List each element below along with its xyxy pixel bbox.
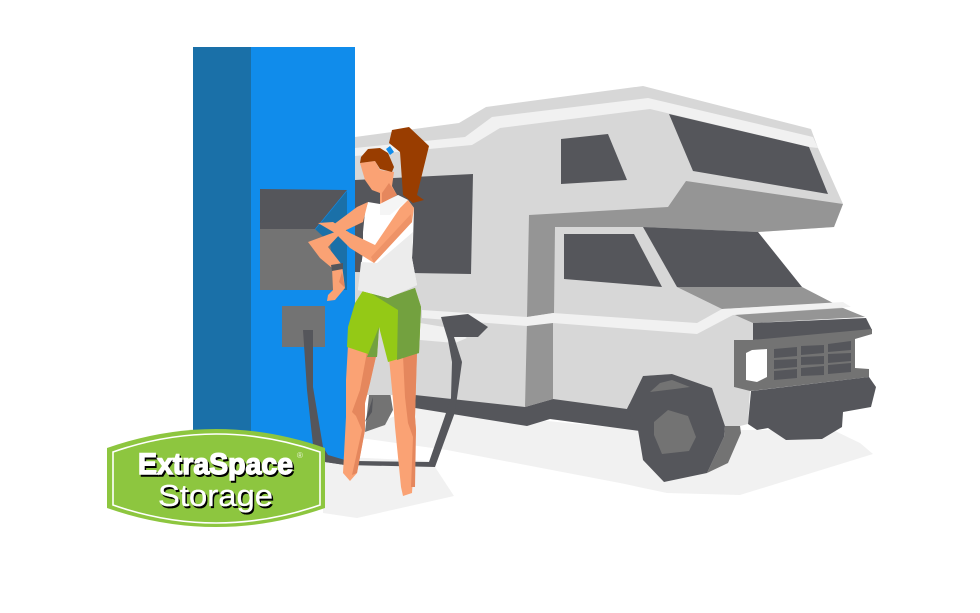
hood front	[735, 308, 865, 323]
woman	[308, 127, 429, 496]
power post and cable	[325, 314, 488, 467]
logo: Extra Space Storage	[107, 429, 325, 527]
large side window	[355, 174, 473, 274]
logo text: ®	[297, 451, 303, 460]
ground shadows	[323, 408, 873, 518]
RV	[355, 86, 876, 482]
body stripe	[422, 302, 851, 334]
grille frame	[734, 329, 872, 391]
watch	[331, 263, 343, 271]
right leg	[389, 352, 417, 496]
logo text shadow: ExtraSpace	[140, 450, 294, 483]
logo text shadow	[140, 450, 294, 515]
logo text: ExtraSpace	[138, 448, 293, 481]
hair tie	[386, 146, 394, 155]
far arm	[333, 202, 368, 233]
storage tower	[193, 47, 355, 465]
forearm and hand	[308, 232, 345, 301]
windshield	[643, 227, 802, 287]
overcab window	[669, 114, 828, 194]
roof stripe	[355, 98, 818, 156]
outlet box and cord	[282, 306, 345, 465]
lower grey strip	[525, 320, 553, 407]
RV chassis	[415, 393, 640, 431]
lower stripe	[420, 323, 467, 343]
hood	[677, 287, 833, 309]
wall panel	[260, 189, 347, 290]
overhang shadow	[527, 181, 843, 317]
RV rear tire	[365, 386, 393, 432]
front wheel	[627, 374, 741, 482]
roof edge	[355, 86, 818, 158]
tank top	[358, 195, 417, 298]
logo text shadow: Storage	[160, 480, 274, 515]
face and neck	[360, 161, 397, 205]
small side window	[561, 134, 627, 184]
head hair	[360, 148, 394, 172]
camper and cab body	[355, 109, 865, 426]
logo text: Storage	[158, 478, 273, 513]
shorts	[347, 288, 421, 362]
grille top	[753, 318, 872, 340]
grille slats	[774, 341, 851, 380]
bumper	[748, 377, 876, 440]
cab door window	[564, 234, 662, 287]
headlight	[746, 349, 767, 382]
left leg	[343, 345, 377, 481]
ponytail	[389, 127, 429, 203]
near arm	[318, 200, 414, 263]
logo text	[138, 448, 303, 513]
